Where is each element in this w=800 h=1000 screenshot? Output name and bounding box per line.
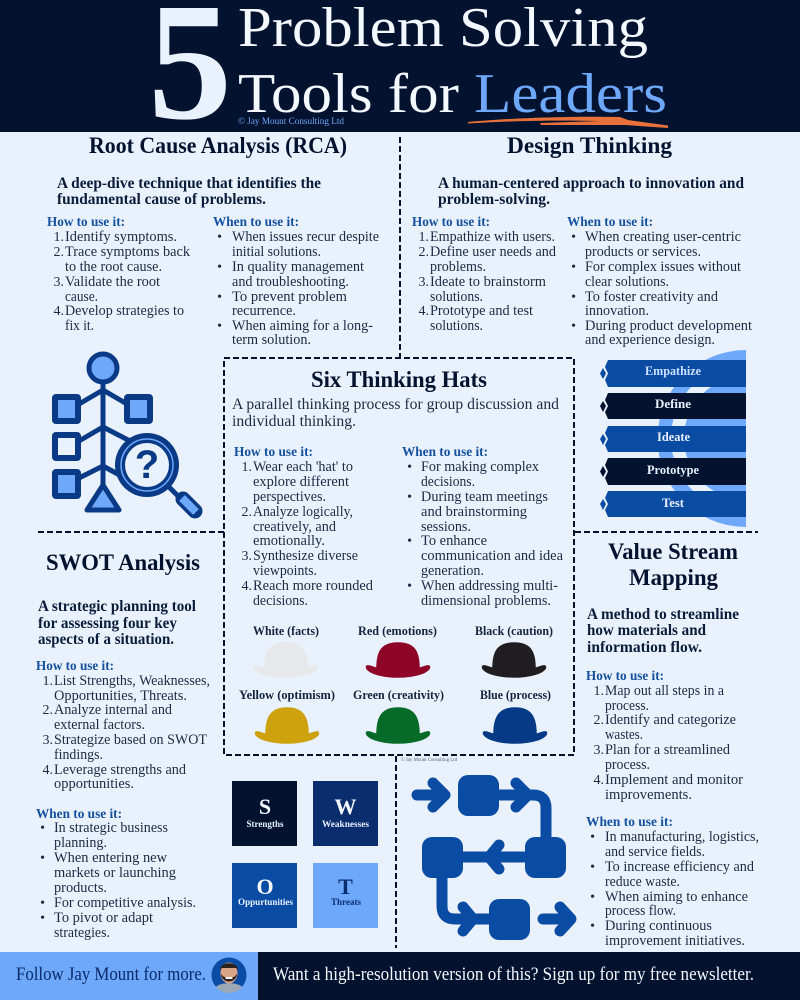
RCA when to use it: • [217, 290, 222, 305]
design thinking how to use it [412, 214, 556, 334]
step: Define: Define [655, 396, 691, 411]
RCA when to use it: When issues recur despite [232, 229, 379, 245]
SWOT when to use it: • [40, 896, 45, 911]
heading: value stream mapping [608, 539, 738, 590]
background rings [658, 350, 746, 527]
design thinking when to use it: innovation. [585, 303, 649, 319]
SWOT how to use it: external factors. [54, 717, 145, 733]
square: weaknesses: Weaknesses [322, 819, 370, 829]
panel divider: top vertical [399, 137, 401, 358]
SWOT how to use it: Analyze internal and [54, 702, 172, 718]
icon: root cause fishbone with magnifier: ? [135, 443, 159, 487]
SWOT how to use it: 2. [42, 703, 53, 718]
design thinking description [438, 175, 744, 208]
six hats description [232, 396, 559, 430]
SWOT how to use it: How to use it: [36, 658, 114, 673]
RCA when to use it: initial solutions. [232, 244, 321, 260]
six hats how to use it: creatively, and [253, 519, 336, 535]
RCA how to use it: cause. [65, 289, 98, 305]
RCA when to use it [213, 214, 379, 348]
six hats how to use it: Wear each 'hat' to [253, 459, 353, 475]
footer left [0, 952, 258, 1000]
square: opportunities: Oppurtunities [238, 897, 294, 907]
value stream how to use it: Identify and categorize [605, 712, 736, 728]
value stream when to use it: When to use it: [586, 814, 673, 829]
hat: black [475, 623, 553, 677]
value stream when to use it: improvement initiatives. [605, 933, 745, 949]
six hats description: individual thinking. [232, 413, 356, 430]
value stream how to use it: wastes. [605, 727, 643, 743]
step: Prototype: Prototype [647, 462, 699, 477]
SWOT when to use it: strategies. [54, 925, 110, 941]
SWOT how to use it [36, 658, 210, 792]
RCA how to use it: Trace symptoms back [65, 244, 190, 260]
RCA how to use it: Validate the root [65, 274, 161, 290]
footer [0, 952, 800, 1000]
RCA how to use it: to the root cause. [65, 259, 162, 275]
design thinking how to use it: 3. [418, 275, 429, 290]
square: opportunities: O [256, 874, 274, 899]
six hats when to use it: sessions. [421, 519, 471, 535]
SWOT description: A strategic planning tool [38, 598, 197, 615]
header banner [0, 0, 800, 155]
hat: white: White (facts) [253, 623, 319, 638]
RCA when to use it: When aiming for a long- [232, 318, 373, 334]
SWOT when to use it: markets or launching [54, 865, 176, 881]
value stream how to use it: Plan for a streamlined [605, 742, 730, 758]
value stream how to use it: 3. [594, 743, 604, 758]
six hats when to use it: For making complex [421, 459, 539, 475]
hat: green [353, 687, 444, 743]
six hats how to use it: explore different [253, 474, 350, 490]
square: opportunities [232, 863, 297, 928]
icon: root cause fishbone with magnifier [55, 354, 196, 512]
SWOT when to use it [36, 806, 196, 941]
step: Empathize [600, 360, 746, 387]
design thinking how to use it: 1. [418, 230, 429, 245]
value stream when to use it: • [590, 919, 595, 934]
SWOT description [38, 598, 197, 648]
title line 2: Tools for Leaders [238, 63, 667, 125]
six hats how to use it: Analyze logically, [253, 504, 353, 520]
value stream when to use it: reduce waste. [605, 874, 680, 890]
design thinking when to use it: When to use it: [567, 214, 653, 229]
SWOT when to use it: For competitive analysis. [54, 895, 196, 911]
design thinking description: problem-solving. [438, 191, 550, 208]
panel: SWOT analysis [36, 550, 210, 941]
step: Test [600, 491, 746, 517]
SWOT when to use it: • [40, 911, 45, 926]
value stream how to use it: Implement and monitor [605, 772, 743, 788]
step: Empathize: Empathize [645, 363, 701, 378]
hat: red: Red (emotions) [358, 623, 437, 638]
SWOT when to use it: When to use it: [36, 806, 122, 821]
value stream how to use it: 1. [594, 684, 604, 699]
value stream when to use it: In manufacturing, logistics, [605, 829, 759, 845]
step: Define [600, 393, 746, 419]
design thinking how to use it: Define user needs and [430, 244, 556, 260]
value stream description: information flow. [587, 639, 702, 656]
SWOT when to use it: To pivot or adapt [54, 910, 154, 926]
panel divider: right horizontal [575, 531, 758, 533]
design thinking how to use it: How to use it: [412, 214, 490, 229]
hat: blue: Blue (process) [480, 687, 551, 702]
SWOT how to use it: 3. [42, 733, 53, 748]
design thinking process graphic [600, 350, 746, 527]
design thinking when to use it: To foster creativity and [585, 289, 718, 305]
design thinking when to use it: • [571, 230, 576, 245]
SWOT when to use it: In strategic business [54, 820, 168, 836]
square: threats: Threats [331, 897, 361, 907]
RCA when to use it: recurrence. [232, 303, 296, 319]
design thinking when to use it: clear solutions. [585, 274, 669, 290]
six hats when to use it: • [407, 579, 412, 594]
six hats when to use it: decisions. [421, 474, 475, 490]
value stream how to use it: 2. [594, 713, 604, 728]
six hats how to use it: viewpoints. [253, 563, 317, 579]
hat: blue [480, 687, 551, 743]
value stream when to use it: • [590, 830, 595, 845]
square: weaknesses [313, 781, 378, 846]
six hats when to use it: During team meetings [421, 489, 548, 505]
six hats when to use it: communication and idea [421, 548, 563, 564]
six hats when to use it: and brainstorming [421, 504, 527, 520]
SWOT how to use it: 1. [42, 674, 53, 689]
footer right: Want a high-resolution version of this? Sign up for my free newsletter. [273, 964, 754, 985]
value stream when to use it: process flow. [605, 903, 676, 919]
RCA how to use it: 4. [54, 304, 64, 319]
six hats description: A parallel thinking process for group discussion and [232, 396, 559, 413]
design thinking when to use it: When creating user-centric [585, 229, 741, 245]
six hats how to use it: decisions. [253, 593, 308, 609]
square: weaknesses: W [334, 794, 356, 819]
footer right [258, 952, 800, 1000]
six hats how to use it: 2. [242, 505, 252, 520]
RCA description: A deep-dive technique that identifies the [57, 175, 321, 192]
design thinking when to use it: During product development [585, 318, 753, 334]
SWOT how to use it: List Strengths, Weaknesses, [54, 673, 210, 689]
design thinking how to use it: 4. [418, 304, 429, 319]
RCA when to use it: In quality management [232, 259, 365, 275]
panel: value stream mapping [586, 539, 759, 949]
RCA how to use it: How to use it: [47, 214, 125, 229]
heading: design thinking: Design Thinking [507, 133, 673, 158]
RCA how to use it: 1. [54, 230, 64, 245]
step: Ideate [600, 426, 746, 452]
value stream description: A method to streamline [587, 606, 739, 623]
design thinking when to use it: • [571, 290, 576, 305]
RCA how to use it: Develop strategies to [65, 303, 184, 319]
value stream how to use it: Map out all steps in a [605, 683, 724, 699]
RCA when to use it: term solution. [232, 332, 311, 348]
icon: value stream flow [417, 775, 571, 940]
SWOT when to use it: products. [54, 880, 107, 896]
SWOT how to use it: 4. [42, 763, 53, 778]
square: strengths [232, 781, 297, 846]
panel divider: left horizontal [38, 531, 224, 533]
six hats when to use it: To enhance [421, 533, 487, 549]
design thinking how to use it: problems. [430, 259, 486, 275]
design thinking how to use it: Empathize with users. [430, 229, 555, 245]
heading: six thinking hats: Six Thinking Hats [311, 367, 487, 392]
RCA how to use it: Identify symptoms. [65, 229, 177, 245]
value stream when to use it: • [590, 860, 595, 875]
hat: yellow: Yellow (optimism) [239, 687, 335, 702]
SWOT how to use it: Opportunities, Threats. [54, 688, 187, 704]
design thinking how to use it: Ideate to brainstorm [430, 274, 546, 290]
SWOT when to use it: planning. [54, 835, 107, 851]
value stream description [587, 606, 739, 656]
heading: SWOT: SWOT Analysis [46, 550, 200, 575]
design thinking when to use it: and experience design. [585, 332, 715, 348]
small copyright: © Jay Mount Consulting Ltd [401, 756, 457, 763]
SWOT when to use it: • [40, 851, 45, 866]
six hats when to use it: When to use it: [402, 444, 488, 459]
panel: design thinking [412, 133, 753, 348]
value stream how to use it: 4. [594, 773, 604, 788]
value stream when to use it: During continuous [605, 918, 712, 934]
hat: yellow [239, 687, 335, 743]
design thinking when to use it: For complex issues without [585, 259, 742, 275]
orange underline [468, 117, 668, 128]
value stream when to use it: and service fields. [605, 844, 705, 860]
panel: root cause analysis [47, 133, 379, 348]
value stream how to use it: improvements. [605, 787, 692, 803]
value stream description: how materials and [587, 622, 706, 639]
RCA description [57, 175, 321, 208]
RCA how to use it: fix it. [65, 318, 94, 334]
design thinking how to use it: solutions. [430, 289, 483, 305]
value stream how to use it: How to use it: [586, 668, 664, 683]
square: threats: T [338, 874, 353, 899]
RCA when to use it: To prevent problem [232, 289, 347, 305]
design thinking how to use it: solutions. [430, 318, 483, 334]
six hats how to use it: How to use it: [234, 444, 313, 459]
SWOT matrix [232, 781, 378, 928]
six hats when to use it [402, 444, 563, 609]
panel divider: bottom vertical [395, 756, 397, 948]
footer left: Follow Jay Mount for more. [16, 964, 206, 985]
six hats how to use it: 4. [242, 579, 252, 594]
SWOT how to use it: Strategize based on SWOT [54, 732, 207, 748]
step: Test: Test [662, 495, 685, 510]
design thinking how to use it: 2. [418, 245, 429, 260]
SWOT how to use it: findings. [54, 747, 103, 763]
RCA when to use it: When to use it: [213, 214, 299, 229]
SWOT how to use it: opportunities. [54, 776, 134, 792]
six hats when to use it: • [407, 460, 412, 475]
design thinking when to use it: • [571, 319, 576, 334]
square: strengths: Strengths [246, 819, 284, 829]
value stream when to use it [586, 814, 759, 949]
RCA how to use it [47, 214, 190, 334]
RCA when to use it: • [217, 230, 222, 245]
heading: value stream mapping: Value Stream [608, 539, 738, 564]
six hats when to use it: generation. [421, 563, 484, 579]
SWOT description: aspects of a situation. [38, 631, 174, 648]
step: Prototype [600, 458, 746, 485]
value stream how to use it: process. [605, 698, 649, 714]
design thinking how to use it: Prototype and test [430, 303, 534, 319]
six hats how to use it [234, 444, 373, 609]
RCA how to use it: 2. [54, 245, 64, 260]
SWOT when to use it: When entering new [54, 850, 167, 866]
RCA when to use it: • [217, 260, 222, 275]
six hats how to use it: 3. [242, 549, 252, 564]
SWOT when to use it: • [40, 821, 45, 836]
six hats how to use it: 1. [242, 460, 252, 475]
hat: black: Black (caution) [475, 623, 553, 638]
design thinking when to use it: • [571, 260, 576, 275]
design thinking description: A human-centered approach to innovation and [438, 175, 744, 192]
hat: red [358, 623, 437, 677]
RCA how to use it: 3. [54, 275, 64, 290]
copyright: © Jay Mount Consulting Ltd [238, 116, 344, 127]
square: strengths: S [259, 794, 271, 819]
value stream how to use it: process. [605, 757, 650, 773]
RCA when to use it: and troubleshooting. [232, 274, 349, 290]
value stream when to use it: When aiming to enhance [605, 889, 748, 905]
SWOT how to use it: Leverage strengths and [54, 762, 186, 778]
value stream when to use it: To increase efficiency and [605, 859, 754, 875]
design thinking when to use it [567, 214, 753, 348]
design thinking when to use it: products or services. [585, 244, 701, 260]
six hats when to use it: • [407, 490, 412, 505]
RCA when to use it: • [217, 319, 222, 334]
panel: six thinking hats [224, 358, 574, 755]
avatar [212, 958, 246, 993]
value stream how to use it [586, 668, 743, 803]
six hats how to use it: emotionally. [253, 533, 325, 549]
RCA description: fundamental cause of problems. [57, 191, 266, 208]
square: threats [313, 863, 378, 928]
hat: green: Green (creativity) [353, 687, 444, 702]
six hats when to use it: dimensional problems. [421, 593, 551, 609]
six hats when to use it: • [407, 534, 412, 549]
six hats how to use it: perspectives. [253, 489, 326, 505]
step: Ideate: Ideate [657, 429, 690, 444]
SWOT description: for assessing four key [38, 615, 177, 632]
value stream when to use it: • [590, 890, 595, 905]
six hats when to use it: When addressing multi- [421, 578, 558, 594]
heading: RCA: Root Cause Analysis (RCA) [89, 133, 347, 158]
heading: value stream mapping: Mapping [629, 565, 718, 590]
hat: white [253, 623, 319, 677]
six hats how to use it: Synthesize diverse [253, 548, 358, 564]
six hats how to use it: Reach more rounded [253, 578, 373, 594]
